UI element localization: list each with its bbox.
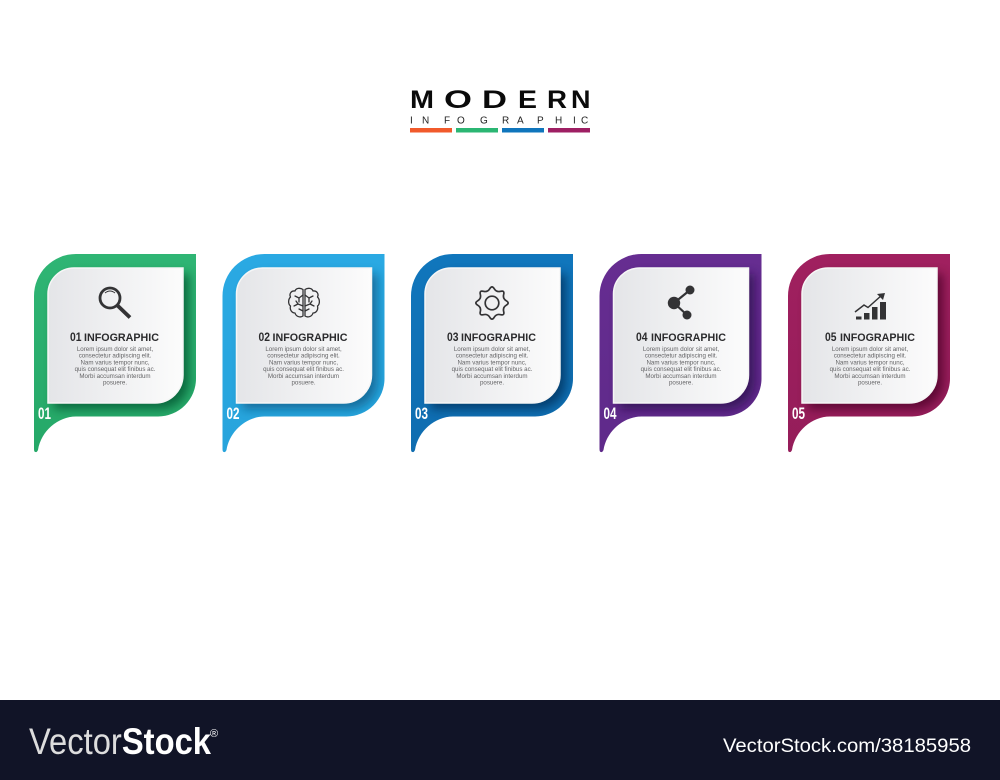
body text: Lorem ipsum dolor sit amet, — [77, 346, 153, 353]
title: MODERN INFOGRAPHIC — [410, 86, 590, 132]
heading: MODERN: N — [571, 86, 590, 114]
heading: 01 INFOGRAPHIC: 01 — [70, 332, 82, 344]
heading: 03 INFOGRAPHIC: INFOGRAPHIC — [461, 332, 536, 344]
body text: quis consequat elit finibus ac. — [452, 366, 533, 373]
icon: brain — [289, 288, 319, 317]
heading: MODERN — [410, 86, 590, 114]
body text — [830, 346, 911, 386]
heading: 05 INFOGRAPHIC: 05 — [825, 332, 837, 344]
heading: MODERN: M — [410, 86, 434, 114]
heading: MODERN: R — [547, 86, 567, 114]
body text: quis consequat elit finibus ac. — [830, 366, 911, 373]
heading: 04 INFOGRAPHIC: INFOGRAPHIC — [651, 332, 726, 344]
icon: share — [668, 286, 694, 320]
body text: Morbi accumsan interdum — [268, 373, 339, 380]
footer url: VectorStock.com/38185958 — [723, 736, 971, 757]
heading: MODERN: O — [444, 86, 472, 114]
footer logo: registered mark: ® — [210, 728, 218, 740]
body text: posuere. — [669, 379, 693, 386]
body text: quis consequat elit finibus ac. — [641, 366, 722, 373]
heading: 02 INFOGRAPHIC: 02 — [258, 332, 270, 344]
subheading: INFOGRAPHIC: INFOGRAPHIC — [410, 116, 588, 126]
body text: posuere. — [291, 379, 316, 386]
body text — [641, 346, 722, 386]
panel: step 05 — [788, 254, 950, 452]
panel shape: light blue speech bubble — [222, 254, 385, 452]
footer logo: VectorStock: VectorStock — [29, 721, 211, 762]
body text: posuere. — [858, 379, 882, 386]
panel shape: green speech bubble — [34, 254, 196, 452]
body text: Nam varius tempor nunc, — [80, 359, 150, 366]
heading: 04 INFOGRAPHIC: 04 — [636, 332, 648, 344]
body text: Morbi accumsan interdum — [645, 373, 717, 380]
step number 03: 03 — [415, 404, 428, 423]
body text: quis consequat elit finibus ac. — [75, 366, 156, 373]
body text: consectetur adipiscing elit. — [834, 353, 907, 360]
body text: quis consequat elit finibus ac. — [263, 366, 344, 373]
body text: posuere. — [480, 379, 504, 386]
body text: Lorem ipsum dolor sit amet, — [643, 346, 719, 353]
body text: posuere. — [103, 379, 127, 386]
step number 02: 02 — [226, 404, 240, 423]
icon: magnifying glass — [100, 288, 130, 318]
body text: Nam varius tempor nunc, — [269, 359, 338, 366]
body text: consectetur adipiscing elit. — [645, 353, 718, 360]
colour bars — [410, 128, 590, 132]
body text: consectetur adipiscing elit. — [456, 353, 529, 360]
body text: Nam varius tempor nunc, — [457, 359, 527, 366]
icon: gear — [476, 287, 508, 319]
panel shape: magenta speech bubble — [788, 254, 950, 452]
panel: step 02 — [222, 254, 385, 452]
footer bar — [0, 700, 1000, 780]
body text: Lorem ipsum dolor sit amet, — [454, 346, 530, 353]
panel shape: blue speech bubble — [411, 254, 573, 452]
body text: Nam varius tempor nunc, — [835, 359, 905, 366]
panel: step 01 — [34, 254, 196, 452]
panel: step 03 — [411, 254, 573, 452]
body text: Morbi accumsan interdum — [456, 373, 528, 380]
body text: Morbi accumsan interdum — [79, 373, 151, 380]
panel: step 04 — [600, 254, 762, 452]
body text: consectetur adipiscing elit. — [267, 353, 340, 360]
heading: MODERN: E — [518, 86, 537, 114]
body text — [452, 346, 533, 386]
heading: 05 INFOGRAPHIC: INFOGRAPHIC — [840, 332, 915, 344]
panel shape: purple speech bubble — [600, 254, 762, 452]
heading: 01 INFOGRAPHIC: INFOGRAPHIC — [84, 332, 159, 344]
heading: 02 INFOGRAPHIC: INFOGRAPHIC — [272, 332, 348, 344]
step number 04: 04 — [604, 404, 617, 423]
heading: 03 INFOGRAPHIC: 03 — [447, 332, 458, 344]
step number 01: 01 — [38, 404, 51, 423]
body text: Lorem ipsum dolor sit amet, — [832, 346, 908, 353]
body text: consectetur adipiscing elit. — [79, 353, 152, 360]
body text: Nam varius tempor nunc, — [646, 359, 716, 366]
icon: rising bar chart — [855, 293, 886, 320]
body text: Morbi accumsan interdum — [834, 373, 906, 380]
body text — [263, 346, 344, 386]
body text — [75, 346, 156, 386]
body text: Lorem ipsum dolor sit amet, — [265, 346, 342, 353]
heading: MODERN: D — [482, 86, 507, 114]
step number 05: 05 — [792, 404, 805, 423]
